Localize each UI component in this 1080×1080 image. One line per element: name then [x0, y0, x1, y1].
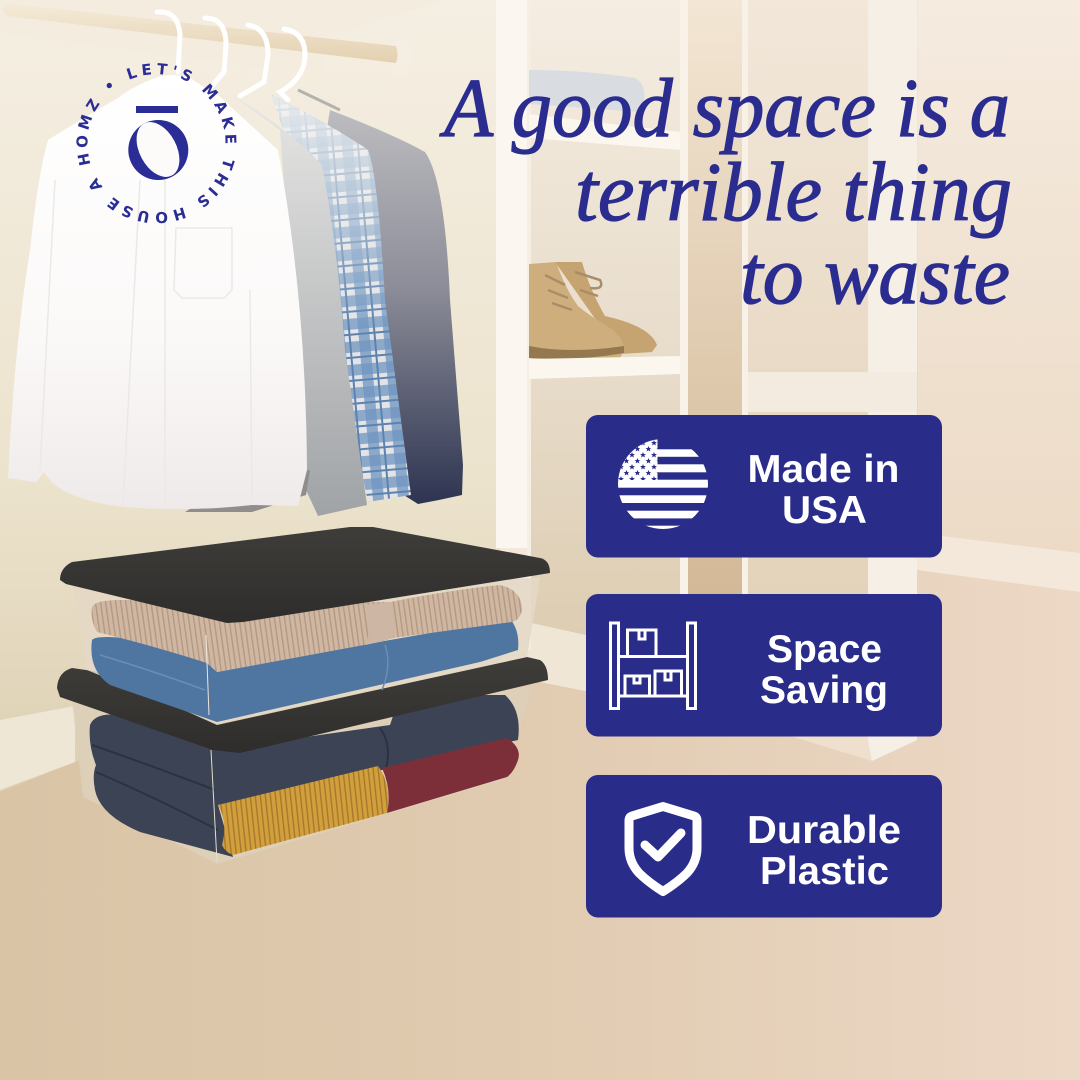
lower shelf board	[529, 356, 680, 379]
label: Saving	[760, 669, 888, 712]
carpet floor	[0, 570, 1080, 1080]
shelving niche	[527, 0, 683, 740]
upper bin front edge	[206, 635, 209, 715]
badge: Made in USA	[586, 415, 942, 558]
navy sweater	[320, 110, 463, 504]
shirt tail	[185, 470, 310, 512]
logo ring	[128, 120, 188, 180]
white post	[496, 0, 527, 548]
shelf board	[529, 114, 680, 150]
white strip	[742, 0, 748, 596]
label: Space	[767, 628, 882, 671]
top shelf and wall strip	[0, 0, 443, 76]
boots on shelf	[529, 262, 680, 379]
shirt details	[40, 180, 252, 505]
gray shirt	[232, 95, 367, 516]
left wall	[0, 0, 500, 800]
label: Durable	[747, 809, 901, 852]
clothes rail	[3, 3, 411, 76]
niche right edge	[680, 0, 688, 595]
lower bin body	[72, 687, 533, 864]
stacked storage bins	[57, 527, 550, 864]
blue blanket	[91, 619, 518, 722]
upper bin body	[73, 578, 540, 724]
label: Plastic	[760, 850, 889, 893]
lower bin front edge	[211, 750, 217, 862]
heading line 2: terrible thing	[575, 146, 1012, 239]
lower lid	[57, 657, 548, 753]
heading line 3: to waste	[740, 229, 1010, 322]
left baseboard	[0, 706, 75, 790]
rail bracket	[389, 36, 411, 76]
badge background	[586, 775, 942, 918]
middle wall	[748, 0, 918, 770]
logo bar	[136, 106, 178, 113]
badge background	[586, 594, 942, 736]
rail	[3, 3, 398, 63]
front boot	[529, 262, 624, 360]
logo ring inner	[128, 115, 188, 184]
column base on carpet	[748, 594, 917, 761]
rear boot	[555, 262, 657, 354]
laces	[545, 272, 601, 310]
logo badge	[76, 63, 236, 224]
heading line 1: A good space is a	[439, 62, 1010, 155]
circular tagline: LET'S MAKE THIS HOUSE A HOMZ •	[76, 63, 236, 224]
moulding	[748, 372, 917, 412]
blanket fold	[100, 645, 388, 690]
badge: Space Saving	[586, 594, 942, 736]
upper lid	[60, 527, 550, 623]
right wall	[917, 0, 1080, 600]
beige cuff	[366, 602, 395, 645]
icon: US flag	[618, 439, 708, 529]
mustard sweater	[218, 766, 388, 855]
hangers	[157, 12, 305, 100]
heading	[439, 62, 1012, 322]
red sweater	[382, 738, 519, 813]
right baseboard	[917, 533, 1080, 592]
icon: shelving with boxes	[610, 623, 696, 708]
icon: shield with check	[629, 806, 697, 892]
plaid fade	[272, 95, 390, 340]
navy garments left	[90, 695, 519, 857]
beige sweater	[92, 585, 522, 672]
badge: Durable Plastic	[586, 775, 942, 918]
badge background	[586, 415, 942, 558]
navy fold lines	[92, 728, 388, 830]
plaid shirt	[272, 95, 411, 502]
hanger wire	[298, 90, 340, 110]
tan column	[683, 0, 748, 770]
post base	[527, 0, 531, 650]
shelf with towel	[529, 70, 680, 150]
folded towel	[529, 70, 644, 112]
label: USA	[782, 489, 867, 532]
lower baseboard in niche	[527, 622, 790, 736]
white shirt	[8, 75, 307, 509]
label: Made in	[748, 448, 900, 491]
boot sole	[529, 346, 624, 359]
white column	[868, 0, 917, 761]
hanging clothes	[8, 12, 463, 516]
